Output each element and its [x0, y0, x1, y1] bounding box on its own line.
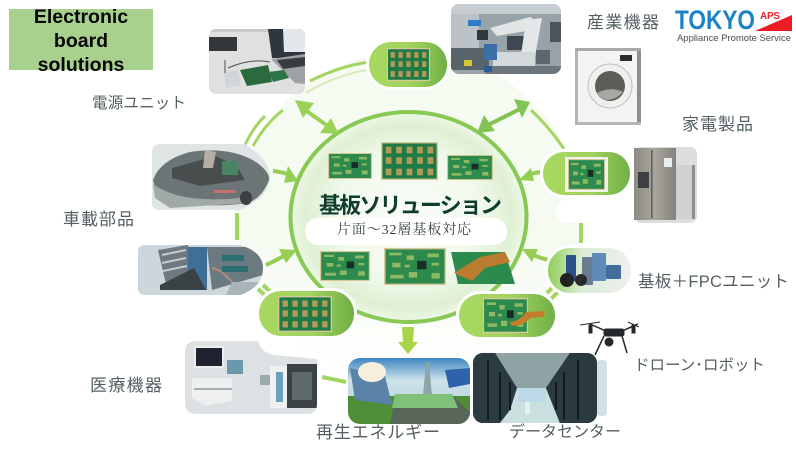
arrow: car to centre — [273, 166, 298, 183]
label: board + FPC: 基板＋FPCユニット — [638, 272, 789, 291]
double arrow: top left — [295, 100, 339, 134]
arrow: server to centre — [266, 249, 297, 265]
centre subtitle — [305, 218, 507, 245]
pill: lower right PCB with flex — [456, 291, 558, 340]
logo: TOKYO APS — [675, 5, 792, 44]
pill: devices — [545, 245, 634, 296]
photo: washing machine — [575, 48, 641, 125]
title box: solutions — [38, 54, 124, 76]
label: power unit: 電源ユニット — [92, 94, 186, 112]
label: industrial: 産業機器 — [587, 13, 659, 32]
outer ring arcs — [237, 62, 581, 382]
inner circle — [290, 112, 526, 322]
centre PCB row: top — [328, 142, 493, 180]
label: drones and robots: ドローン･ロボット — [634, 356, 765, 374]
logo: TOKYO APS: TOKYO — [675, 5, 755, 35]
photo: server equipment — [138, 245, 263, 295]
label: data centre: データセンター — [509, 422, 621, 441]
title box — [9, 6, 153, 76]
arrow: right pill to centre — [519, 168, 541, 181]
photo: refrigerator — [634, 147, 697, 223]
label: medical: 医療機器 — [90, 376, 162, 395]
title box: Electronic — [34, 6, 128, 28]
drone — [580, 322, 639, 355]
arrow: devices to centre — [522, 249, 549, 262]
photo: renewable energy — [348, 358, 470, 424]
photo: data centre — [473, 353, 607, 423]
logo: TOKYO APS: Appliance Promote Service — [677, 33, 791, 44]
logo: TOKYO APS: APS — [760, 11, 780, 22]
photo: medical equipment — [185, 341, 317, 414]
double arrow: top right — [477, 99, 530, 133]
label: renewable energy: 再生エネルギー — [316, 423, 440, 442]
title box: board — [54, 30, 108, 52]
centre PCB row: bottom — [320, 248, 515, 285]
photo: power unit — [209, 29, 305, 94]
white patch under right pill — [556, 199, 621, 223]
pill: right PCB — [540, 149, 633, 198]
photo: car cutaway — [152, 144, 270, 210]
centre heading: 基板ソリューション — [319, 193, 502, 218]
arrow: down to renewable energy — [398, 327, 418, 354]
pill: top PCB — [366, 39, 450, 90]
photo: industrial robot — [451, 4, 561, 74]
centre subtitle: 片面～32層基板対応 — [337, 221, 472, 238]
label: home appliances: 家電製品 — [682, 115, 753, 134]
label: automotive: 車載部品 — [63, 210, 134, 229]
background disc — [237, 52, 581, 382]
pill: lower left PCB — [256, 288, 357, 339]
